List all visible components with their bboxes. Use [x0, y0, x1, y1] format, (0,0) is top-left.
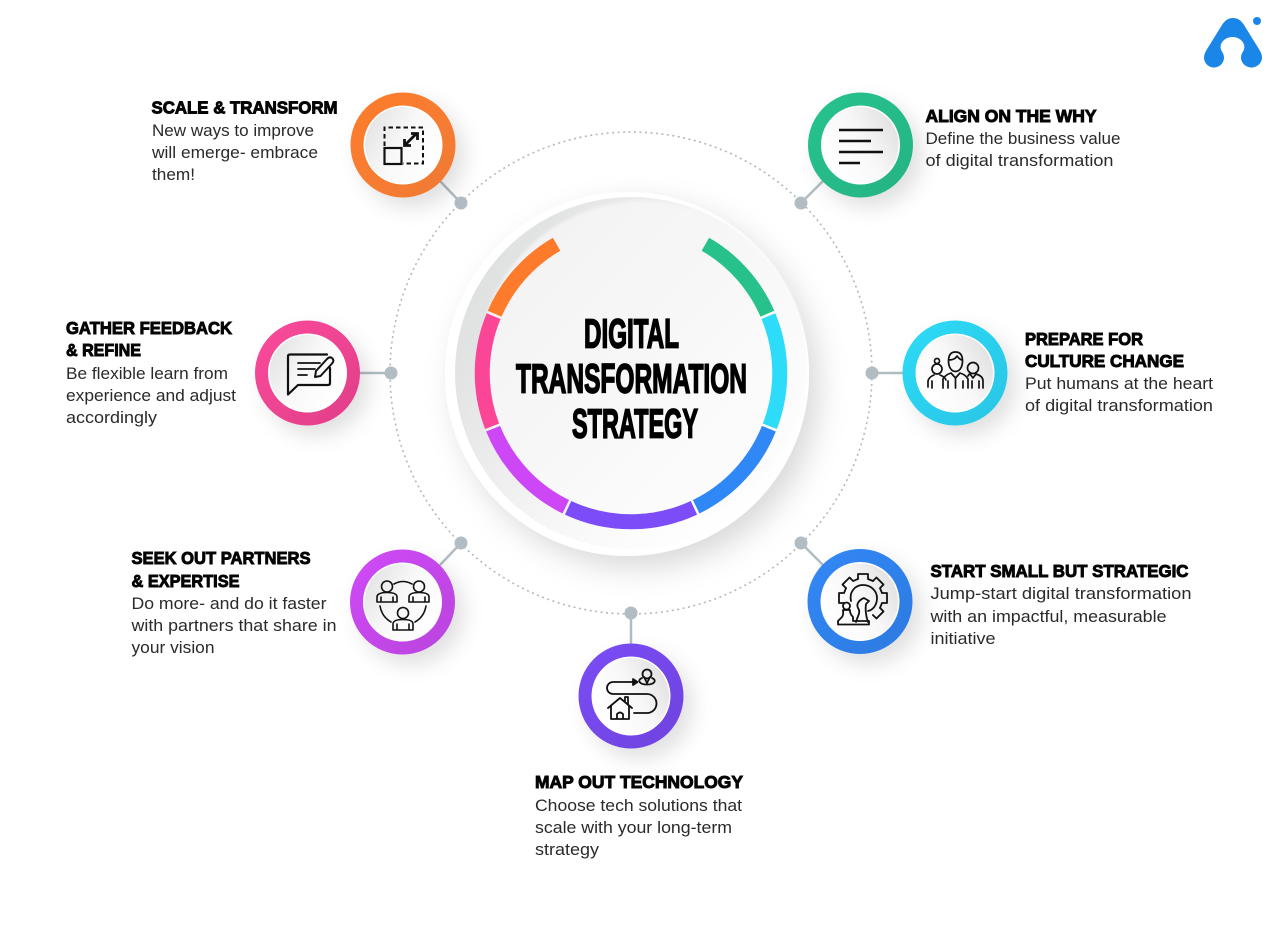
text: experience and adjust [66, 387, 237, 405]
heading: SEEK OUT PARTNERS [132, 548, 310, 568]
text [1025, 375, 1214, 415]
step: scale and transform [151, 92, 456, 198]
heading: & EXPERTISE [132, 571, 240, 591]
text [929, 585, 1192, 648]
text: them! [152, 166, 195, 184]
step: align on the why [808, 92, 1120, 198]
icon badge: blue [808, 549, 912, 654]
heading: & REFINE [66, 340, 141, 360]
text: Be flexible learn from [66, 365, 228, 383]
text: of digital transformation [1025, 397, 1213, 415]
text [66, 365, 237, 427]
title: DIGITAL [584, 310, 679, 356]
ring segments [482, 244, 780, 522]
heading [132, 548, 310, 591]
title: STRATEGY [572, 400, 698, 446]
text [130, 595, 336, 657]
icon badge: cyan [902, 320, 1008, 426]
dial core [479, 201, 807, 529]
text: New ways to improve [152, 122, 314, 140]
text: scale with your long-term [535, 819, 732, 837]
gear teeth [839, 574, 887, 619]
connectors [358, 181, 906, 645]
step: start small but strategic [808, 549, 1192, 654]
heading [66, 318, 232, 360]
heading: MAP OUT TECHNOLOGY [535, 772, 743, 792]
step: seek out partners and expertise [130, 548, 455, 657]
dial base disc [445, 192, 809, 556]
text [151, 122, 318, 184]
heading: ALIGN ON THE WHY [926, 106, 1097, 126]
heading [1025, 329, 1184, 371]
text: accordingly [66, 409, 158, 427]
connector nodes [384, 196, 878, 620]
text: strategy [535, 841, 600, 859]
heading: START SMALL BUT STRATEGIC [930, 561, 1189, 581]
text: your vision [132, 639, 214, 657]
dial bevel [455, 197, 807, 549]
text [926, 130, 1120, 170]
heading: SCALE & TRANSFORM [152, 98, 338, 118]
heading: GATHER FEEDBACK [66, 318, 232, 338]
dotted orbit ring [390, 132, 872, 614]
icon badge: magenta [350, 550, 455, 654]
title [516, 310, 747, 446]
heading: PREPARE FOR [1025, 329, 1143, 349]
text: will emerge- embrace [151, 144, 318, 162]
icon badge: violet [578, 644, 684, 748]
step: gather feedback and refine [66, 318, 360, 427]
text: with an impactful, measurable [929, 608, 1166, 626]
logo [1204, 17, 1262, 68]
text: initiative [930, 630, 996, 648]
text: Put humans at the heart [1025, 375, 1214, 393]
step: prepare for culture change [902, 320, 1214, 426]
text [535, 797, 742, 859]
text: Define the business value [926, 130, 1120, 148]
text: Do more- and do it faster [132, 595, 327, 613]
step: map out technology [535, 644, 743, 859]
text: Choose tech solutions that [535, 797, 742, 815]
icon badge: pink [255, 320, 360, 426]
icon badge: orange [350, 92, 456, 198]
text: Jump-start digital transformation [930, 585, 1192, 603]
center dial [445, 192, 809, 556]
heading: CULTURE CHANGE [1025, 351, 1184, 371]
text: of digital transformation [926, 152, 1114, 170]
icon badge: green [808, 92, 913, 198]
title: TRANSFORMATION [516, 356, 747, 402]
text: with partners that share in [130, 617, 336, 635]
